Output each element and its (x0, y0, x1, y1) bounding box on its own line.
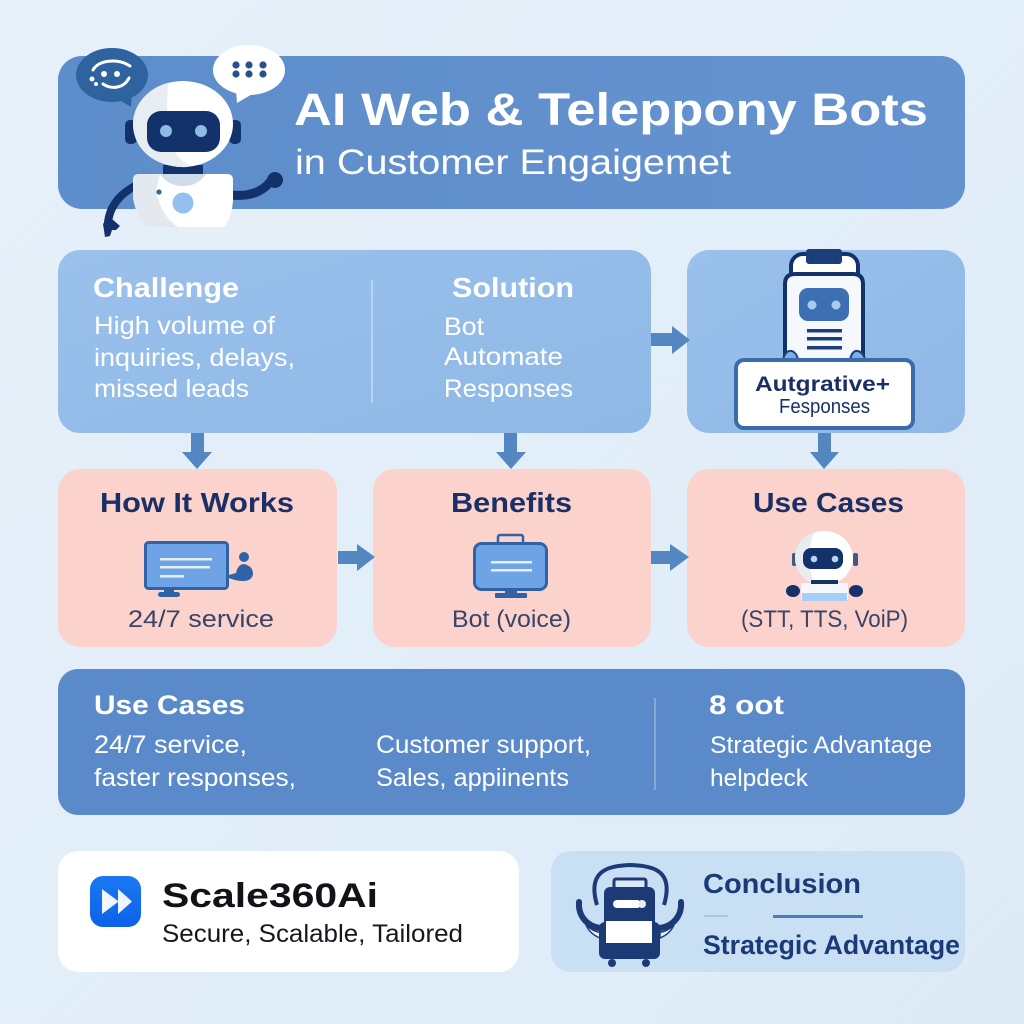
panel: conclusion (551, 851, 965, 972)
heading: band use cases: Use Cases (94, 690, 245, 720)
icon: robot backpack (579, 865, 681, 967)
panel: scale360ai brand (58, 851, 519, 972)
label: bot voice: Bot (voice) (452, 606, 571, 633)
icon: white speech bubble (213, 45, 285, 103)
arrow: how it works to benefits (338, 544, 375, 571)
text: band column three: Strategic Advantage (710, 732, 932, 759)
panel: benefits (373, 469, 651, 647)
text: challenge description: inquiries, delays, (94, 344, 295, 372)
heading: band column three: 8 oot (709, 690, 784, 720)
heading: benefits: Benefits (451, 487, 572, 518)
text: strategic advantage: Strategic Advantage (703, 930, 960, 960)
icon: scale360ai logo (90, 876, 141, 927)
heading: conclusion: Conclusion (703, 868, 861, 899)
text: band column three: helpdeck (710, 765, 809, 792)
text: band column three (710, 732, 932, 792)
icon: robot mascot (103, 81, 283, 237)
text: band column one: 24/7 service, (94, 731, 247, 759)
text: challenge description (94, 312, 295, 403)
text: solution description: Responses (444, 375, 573, 403)
label: 24/7 service: 24/7 service (128, 606, 274, 633)
title: AI Web & Teleppony Bots (294, 84, 928, 135)
arrow: solution down (496, 433, 526, 469)
panel: automated response (687, 249, 965, 433)
text: band column one: faster responses, (94, 764, 296, 792)
heading: solution: Solution (452, 272, 574, 303)
panel: use cases card (687, 469, 965, 647)
arrow: challenge down (182, 433, 212, 469)
text: band column two: Customer support, (376, 731, 591, 759)
panel: challenge and solution (58, 250, 651, 433)
text: challenge description: missed leads (94, 375, 249, 403)
icon: monitor with person (146, 542, 253, 597)
label: stt tts voip: (STT, TTS, VoiP) (741, 606, 908, 633)
panel: use cases band (58, 669, 965, 815)
icon: device robot (783, 249, 865, 365)
tagline: Secure, Scalable, Tailored (162, 920, 463, 948)
heading: challenge: Challenge (93, 272, 239, 303)
text: band column two (376, 731, 591, 792)
arrow: benefits to use cases (651, 544, 689, 571)
text: band column two: Sales, appiinents (376, 764, 569, 792)
heading: how it works: How It Works (100, 487, 294, 518)
label box: Autgrative+ (755, 373, 890, 396)
subtitle: in Customer Engaigemet (295, 143, 731, 182)
brand name: Scale360Ai (162, 877, 378, 915)
panel: header banner (58, 56, 965, 209)
text: solution description (444, 313, 573, 403)
label box (736, 360, 913, 428)
panel: how it works (58, 469, 337, 647)
label box: Fesponses (779, 396, 870, 418)
text: solution description: Automate (444, 343, 563, 371)
arrow: response down (810, 433, 839, 469)
text: band column one (94, 731, 296, 792)
text: solution description: Bot (444, 313, 484, 341)
arrow: solution to response (651, 326, 690, 354)
icon: small robot (786, 531, 863, 601)
heading: use cases: Use Cases (753, 487, 904, 518)
text: challenge description: High volume of (94, 312, 275, 340)
icon: dark speech bubble (76, 48, 148, 107)
icon: monitor with handle (474, 535, 546, 598)
